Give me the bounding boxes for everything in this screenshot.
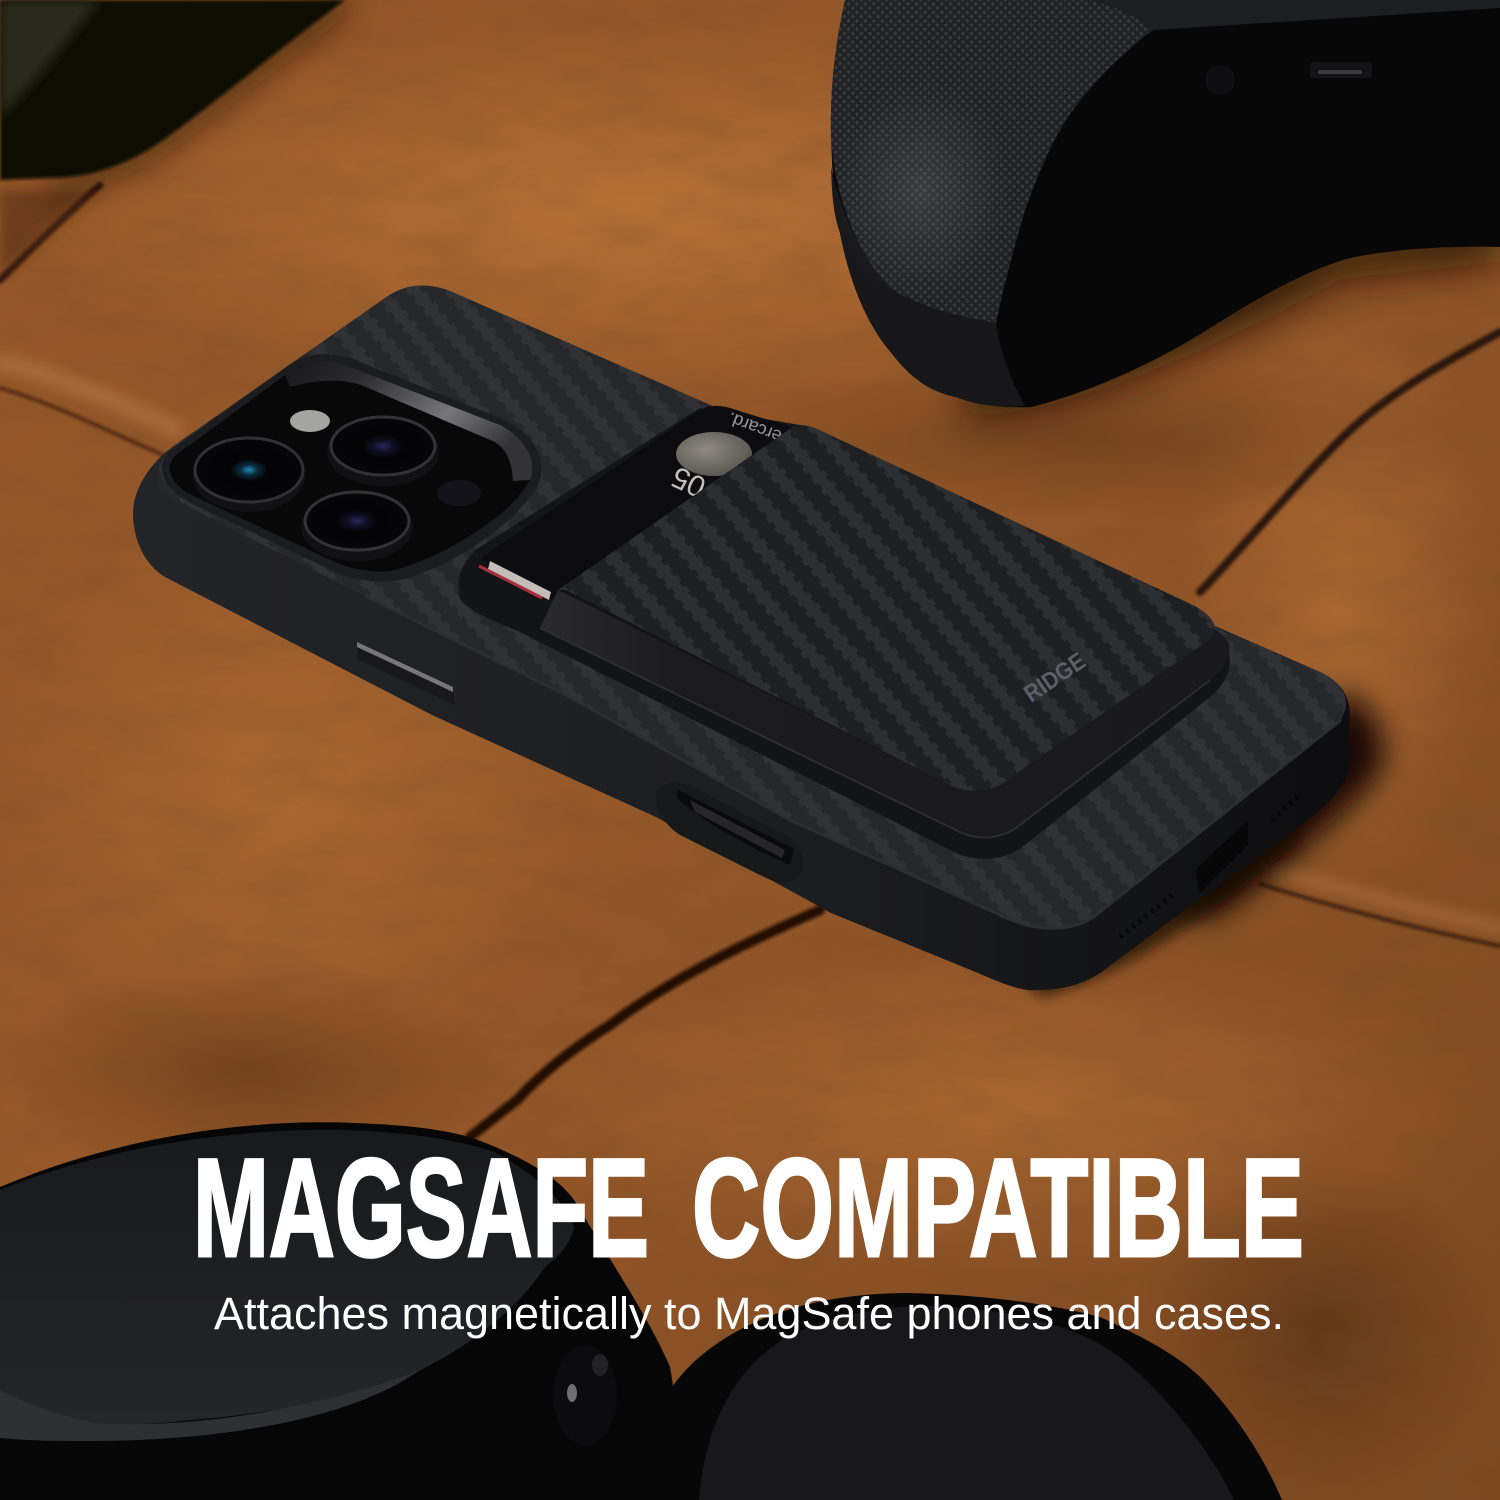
camera raised rim: [285, 361, 532, 481]
controller grip highlight: [830, 80, 1010, 300]
controller shadow: [960, 215, 1500, 415]
left case knob: [553, 1345, 617, 1445]
card number: 05: [667, 460, 711, 504]
left case face: [0, 1130, 574, 1424]
volume button: [357, 642, 455, 705]
charging port: [1120, 793, 1302, 937]
left round case: [0, 1122, 674, 1500]
card text: ercard.: [725, 408, 784, 447]
wallet base plate: [458, 408, 1230, 859]
subheading: Attaches magnetically to MagSafe phones and cases.: [214, 1288, 1284, 1339]
wallet: [458, 406, 1230, 859]
card in slot: [479, 406, 800, 600]
black round objects bottom: [0, 1122, 1282, 1500]
wallet logo: RIDGE: [1019, 648, 1091, 708]
right round case: [612, 1293, 1282, 1500]
phone silhouette and side wall: [133, 286, 1350, 990]
lidar sensor: [437, 480, 481, 506]
phone case: [133, 286, 1350, 990]
lens bottom: [301, 492, 413, 561]
side button: [656, 782, 803, 882]
lens left: [193, 438, 305, 512]
controller body: [831, 0, 1500, 407]
controller lower shell: [831, 167, 1025, 407]
headline: [193, 1129, 1304, 1286]
wallet ridge highlight: [540, 628, 1210, 837]
lens top: [327, 417, 439, 486]
phone shadow: [1000, 690, 1384, 997]
dark fabric top left corner: [0, 0, 345, 275]
controller textured grip: [831, 0, 1153, 323]
camera surround: [162, 354, 541, 582]
left case bevel: [0, 1370, 420, 1441]
game controller top right: [830, 0, 1500, 415]
flash: [290, 410, 330, 432]
phone face edge highlight: [365, 596, 1341, 928]
controller top band: [1086, 0, 1500, 30]
controller port: [1205, 62, 1372, 95]
camera module: [162, 354, 541, 582]
wallet body side: [540, 590, 1230, 837]
leather seams: [0, 185, 1500, 1137]
headline: MAGSAFE: [193, 1129, 649, 1286]
camera glass plate: [170, 361, 532, 572]
phone carbon back: [158, 286, 1346, 928]
wallet top carbon face: [558, 425, 1215, 791]
